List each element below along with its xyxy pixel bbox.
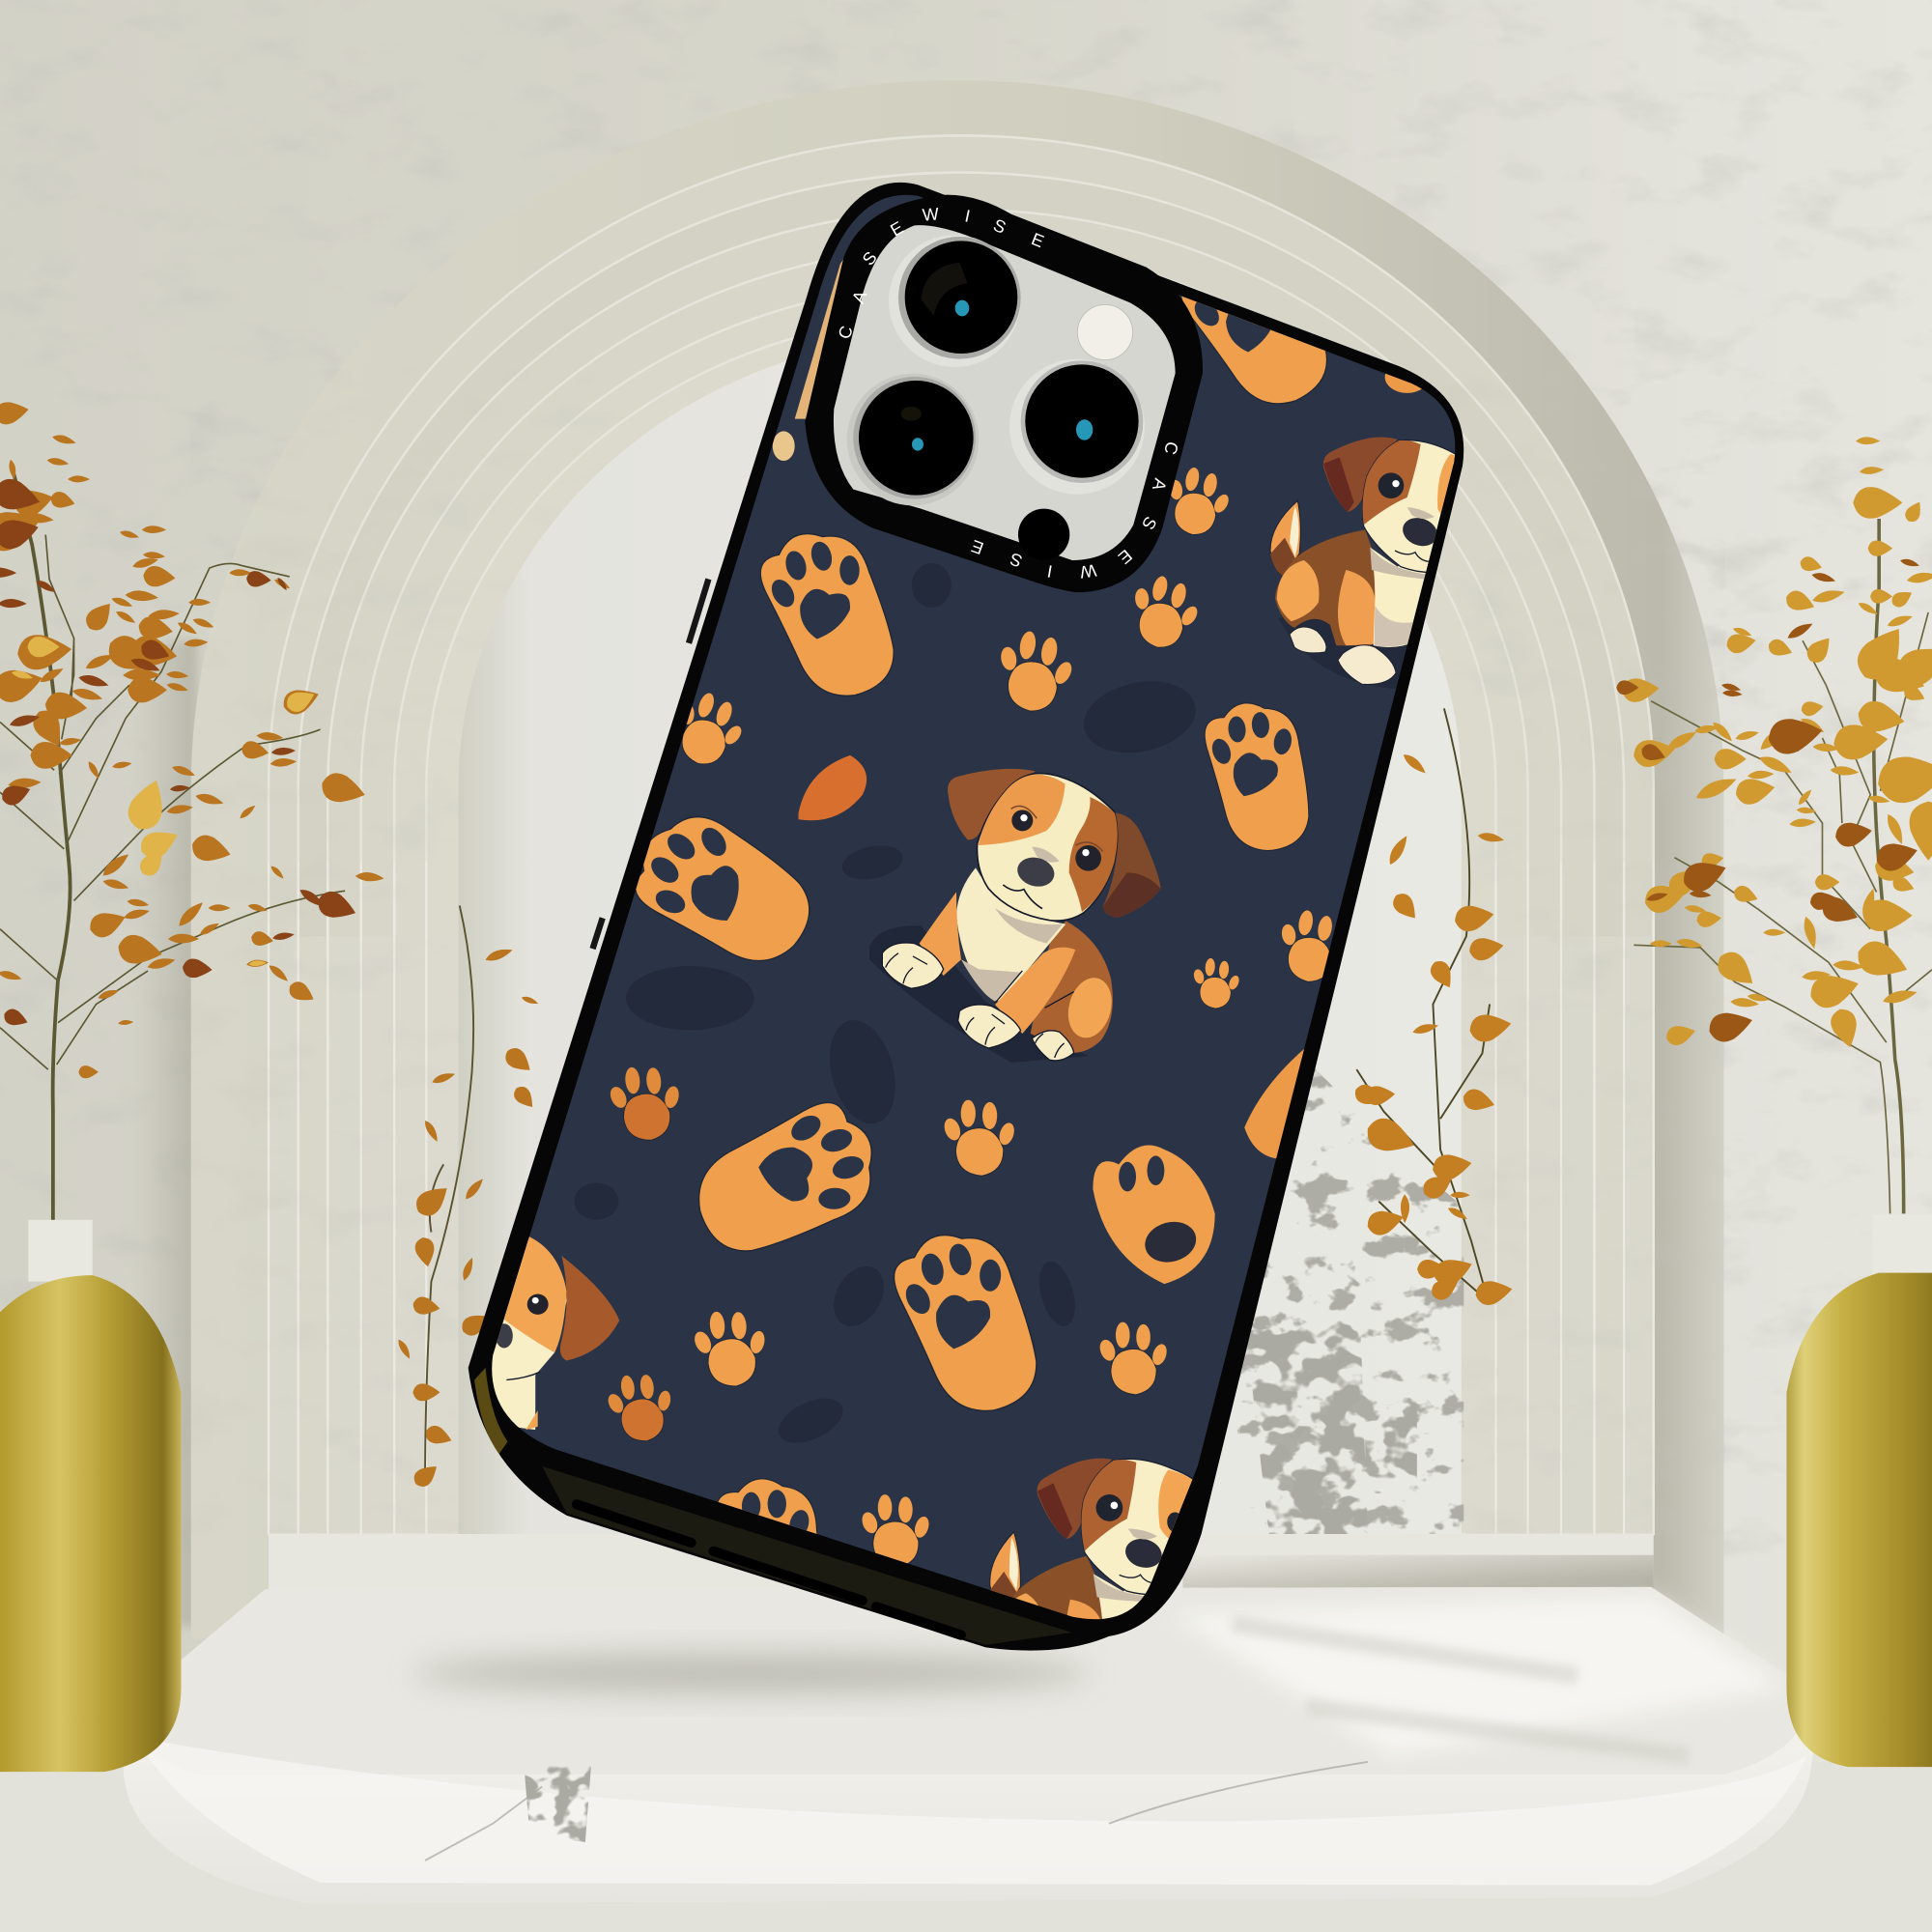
casewise ring lettering: W: [1079, 560, 1097, 582]
casewise ring lettering: C: [835, 324, 857, 341]
big paw prints: [616, 226, 1341, 1639]
camera window: [834, 225, 1176, 560]
small paw prints: [603, 463, 1352, 1567]
arch inner opening: [458, 333, 1462, 1534]
dark background blobs: [574, 563, 1203, 1452]
lens right: [1009, 359, 1145, 495]
casewise ring lettering: S: [1138, 513, 1160, 533]
left golden vase: [0, 1220, 182, 1772]
stepped stone arch: [191, 80, 1725, 1651]
top right puppy: [1269, 437, 1455, 689]
lens bottom left: [847, 374, 979, 505]
camera bumper ring: [805, 195, 1203, 592]
floor: [0, 1762, 1932, 1932]
phone case body: [469, 183, 1463, 1651]
bottom right puppy: [989, 1459, 1192, 1619]
bottom left puppy head: [487, 1236, 619, 1430]
casewise ring lettering: E: [1115, 546, 1136, 568]
phone screen artwork: [492, 195, 1455, 1619]
main puppy: [869, 769, 1161, 1063]
left middle branch with leaves: [396, 906, 539, 1491]
casewise ring lettering: W: [922, 204, 940, 225]
lidar sensor: [1018, 509, 1069, 560]
orange leaf shapes: [799, 361, 1430, 1159]
right golden vase: [1786, 1215, 1932, 1767]
casewise ring lettering: S: [1008, 549, 1025, 571]
casewise ring lettering: E: [1029, 229, 1046, 251]
flash: [1077, 304, 1133, 360]
casewise ring lettering: E: [887, 217, 907, 241]
lens top: [889, 235, 1021, 367]
left tree with golden leaves: [0, 399, 384, 1220]
casewise ring lettering: E: [969, 536, 986, 558]
pattern slivers beside camera ring: [773, 259, 843, 461]
casewise ring lettering: A: [1149, 476, 1171, 493]
rear floor strip: [269, 1534, 1654, 1591]
casewise ring lettering: S: [991, 215, 1009, 238]
casewise ring lettering: S: [859, 248, 881, 270]
glove-shaped paw: [1093, 1146, 1215, 1284]
casewise ring lettering: [835, 204, 1182, 582]
bottom lip: [542, 1466, 1072, 1645]
casewise ring lettering: I: [963, 206, 972, 226]
white marble platform: [123, 1587, 1815, 1904]
side buttons: [593, 579, 708, 949]
casewise ring lettering: C: [1160, 440, 1182, 457]
right middle branch with leaves: [1351, 708, 1514, 1307]
right tree with golden leaves: [1616, 437, 1932, 1213]
marble vein patch on inner wall: [1233, 1047, 1463, 1535]
phone shadow on platform: [412, 1654, 1091, 1693]
casewise ring lettering: A: [848, 288, 870, 306]
camera module: [805, 195, 1203, 592]
bottom speaker and port slots: [577, 1504, 961, 1635]
casewise ring lettering: I: [1045, 561, 1054, 582]
